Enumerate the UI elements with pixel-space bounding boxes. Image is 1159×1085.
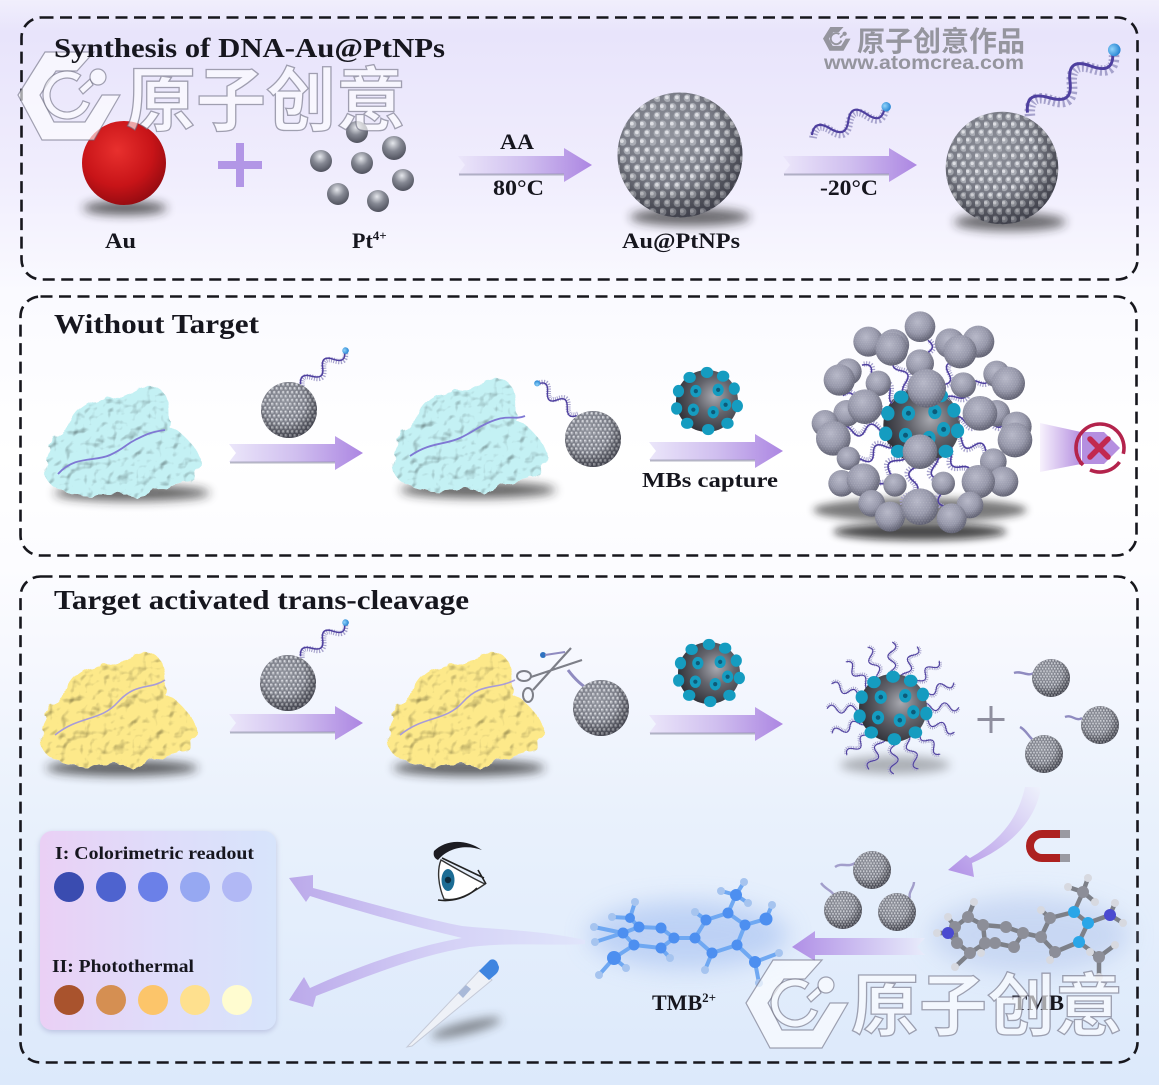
label: Au@PtNPs: Au@PtNPs	[622, 228, 740, 253]
arrow: minus 20C	[783, 148, 917, 182]
icon: bead with DNA strands	[827, 642, 959, 774]
icon: magnet	[1030, 830, 1070, 862]
label: TMB: TMB	[1012, 990, 1064, 1015]
label: Pt4+: 4+	[373, 228, 387, 243]
watermark: top right: 原子创意作品	[857, 26, 1025, 57]
icon: eye	[434, 842, 486, 900]
arrow: MBs capture	[649, 434, 783, 468]
panel 1 dashed frame	[22, 18, 1138, 280]
icon: no signal	[1040, 414, 1134, 482]
icon: nanoparticle group	[821, 851, 916, 931]
background glow behind TMB oxidised	[588, 901, 788, 969]
label: minus 20C: -20°C	[820, 175, 878, 200]
arrow: panel 3 second	[649, 707, 783, 741]
watermark: top left	[18, 52, 406, 140]
panel: target activated trans-cleavage	[20, 576, 1138, 1062]
icon: yellow protein with scissors	[388, 648, 582, 776]
icon: probe nanoparticle 2	[260, 616, 352, 711]
icon: TMB molecule	[933, 874, 1127, 981]
label: Au: Au	[105, 228, 136, 253]
icon: cyan protein with probe	[393, 377, 621, 498]
heading: target activated: Target activated trans-cleavage	[54, 585, 469, 615]
watermark: top left: 原子创意	[126, 62, 406, 140]
icon: aggregated nanoparticles on bead	[812, 311, 1032, 540]
icon: Pt ions	[310, 121, 414, 212]
background glow behind TMB	[930, 897, 1130, 973]
icon: DNA-Au@PtNP	[946, 36, 1127, 231]
panel 2 dashed frame	[20, 296, 1136, 556]
arrow: panel 3 first	[229, 706, 363, 740]
watermark: bottom right: 原子创意	[851, 969, 1123, 1045]
icon: cleaved probe nanoparticle	[540, 652, 629, 736]
label: AA: AA	[500, 129, 534, 154]
label: TMB2+: 2+	[702, 990, 716, 1005]
icon: released nanoparticles	[1014, 659, 1119, 773]
photothermal colour series	[54, 985, 252, 1015]
label: TMB2+: TMB	[652, 990, 702, 1015]
icon: magnetic bead	[671, 367, 743, 435]
icon: thermometer	[407, 959, 502, 1047]
icon: cyan protein	[45, 385, 210, 501]
icon: free DNA probe	[809, 97, 894, 145]
icon: Au@Pt nanoparticle	[618, 92, 750, 226]
icon: magnetic bead 2	[673, 639, 745, 707]
icon: yellow protein	[41, 651, 198, 776]
panel: readout card	[40, 831, 276, 1030]
arrow: forked readout	[289, 875, 585, 1007]
icon: plus 2	[978, 706, 1004, 733]
panel 3 dashed frame	[20, 576, 1138, 1062]
arrow: TMB to TMB2+	[792, 931, 925, 961]
watermark: bottom right	[746, 960, 1123, 1048]
label: MBs capture: MBs capture	[642, 468, 778, 492]
arrow: panel 2 first	[229, 436, 363, 470]
arrow: curved magnetic separation	[948, 787, 1041, 877]
heading: synthesis: Synthesis of DNA-Au@PtNPs	[54, 33, 445, 63]
label: 80C: 80°C	[493, 175, 544, 200]
panel: without target	[20, 296, 1136, 556]
heading: without target: Without Target	[54, 309, 259, 339]
label: Pt4+: Pt	[352, 228, 373, 253]
watermark: top right	[823, 26, 1025, 74]
label: colorimetric readout: I: Colorimetric readout	[55, 843, 254, 863]
arrow: AA 80C	[458, 148, 592, 182]
colorimetric colour series	[54, 872, 252, 902]
watermark: top right: www.atomcrea.com	[823, 53, 1024, 74]
icon: oxidised TMB molecule	[590, 878, 783, 987]
icon: gold nanoparticle	[82, 121, 167, 215]
icon: probe nanoparticle	[261, 344, 352, 438]
label: photothermal: II: Photothermal	[52, 956, 194, 976]
panel: synthesis of DNA-Au@PtNPs	[22, 18, 1138, 280]
icon: plus	[218, 143, 262, 187]
